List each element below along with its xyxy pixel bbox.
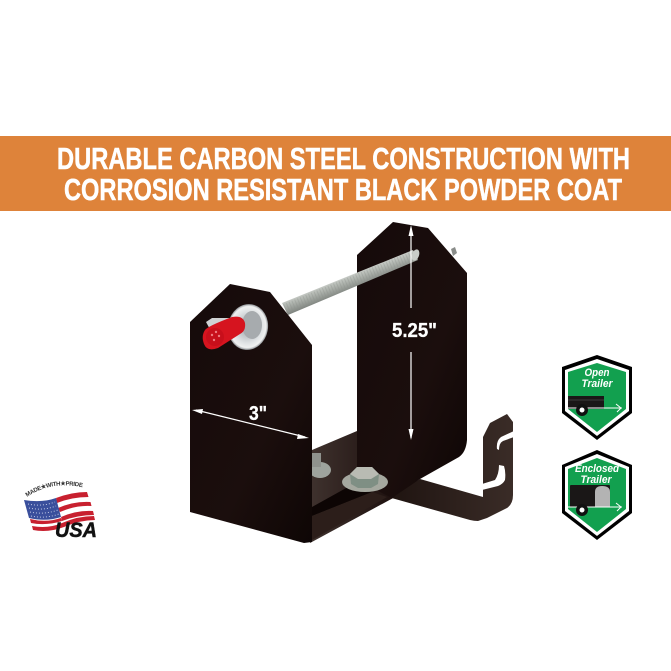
badge: enclosed trailer xyxy=(562,450,632,540)
washer and nut 1 xyxy=(309,453,331,478)
badge label xyxy=(582,367,613,390)
title text xyxy=(57,141,630,207)
badge: open trailer xyxy=(562,355,632,440)
badge label: Open xyxy=(584,367,610,379)
arched caption xyxy=(27,485,81,497)
american flag xyxy=(24,492,95,531)
washer and nut 2 xyxy=(342,467,388,492)
rear dimension arrow xyxy=(408,225,414,440)
badge label: Trailer xyxy=(582,378,613,390)
trailer icon xyxy=(568,485,622,516)
red bolt cap xyxy=(203,317,245,349)
base plate xyxy=(310,431,395,543)
front dimension arrow xyxy=(192,409,309,439)
made with pride USA logo xyxy=(24,480,97,542)
badge label: Enclosed xyxy=(575,463,619,475)
hook notches xyxy=(482,431,514,490)
hook bracket arm xyxy=(388,414,513,521)
rear upright plate xyxy=(357,222,467,498)
orange title banner xyxy=(0,136,671,211)
badge label: Trailer xyxy=(580,474,612,486)
dimension label 5.25: 5.25" xyxy=(392,320,437,342)
product photo: steel bracket xyxy=(190,222,514,543)
trailer icon xyxy=(568,396,622,416)
front washer and nut xyxy=(206,301,272,353)
threaded rod xyxy=(282,248,421,315)
badge label xyxy=(575,463,619,486)
USA wordmark: USA xyxy=(55,519,97,542)
flag stars xyxy=(28,502,59,517)
rear bolt tip xyxy=(451,247,457,256)
front upright plate xyxy=(190,284,312,543)
base plate slot xyxy=(312,482,372,516)
made with pride USA logo: MADE★WITH★PRIDE xyxy=(25,480,83,497)
base plate lower lip xyxy=(312,492,387,540)
dimension label 3: 3" xyxy=(249,403,267,425)
